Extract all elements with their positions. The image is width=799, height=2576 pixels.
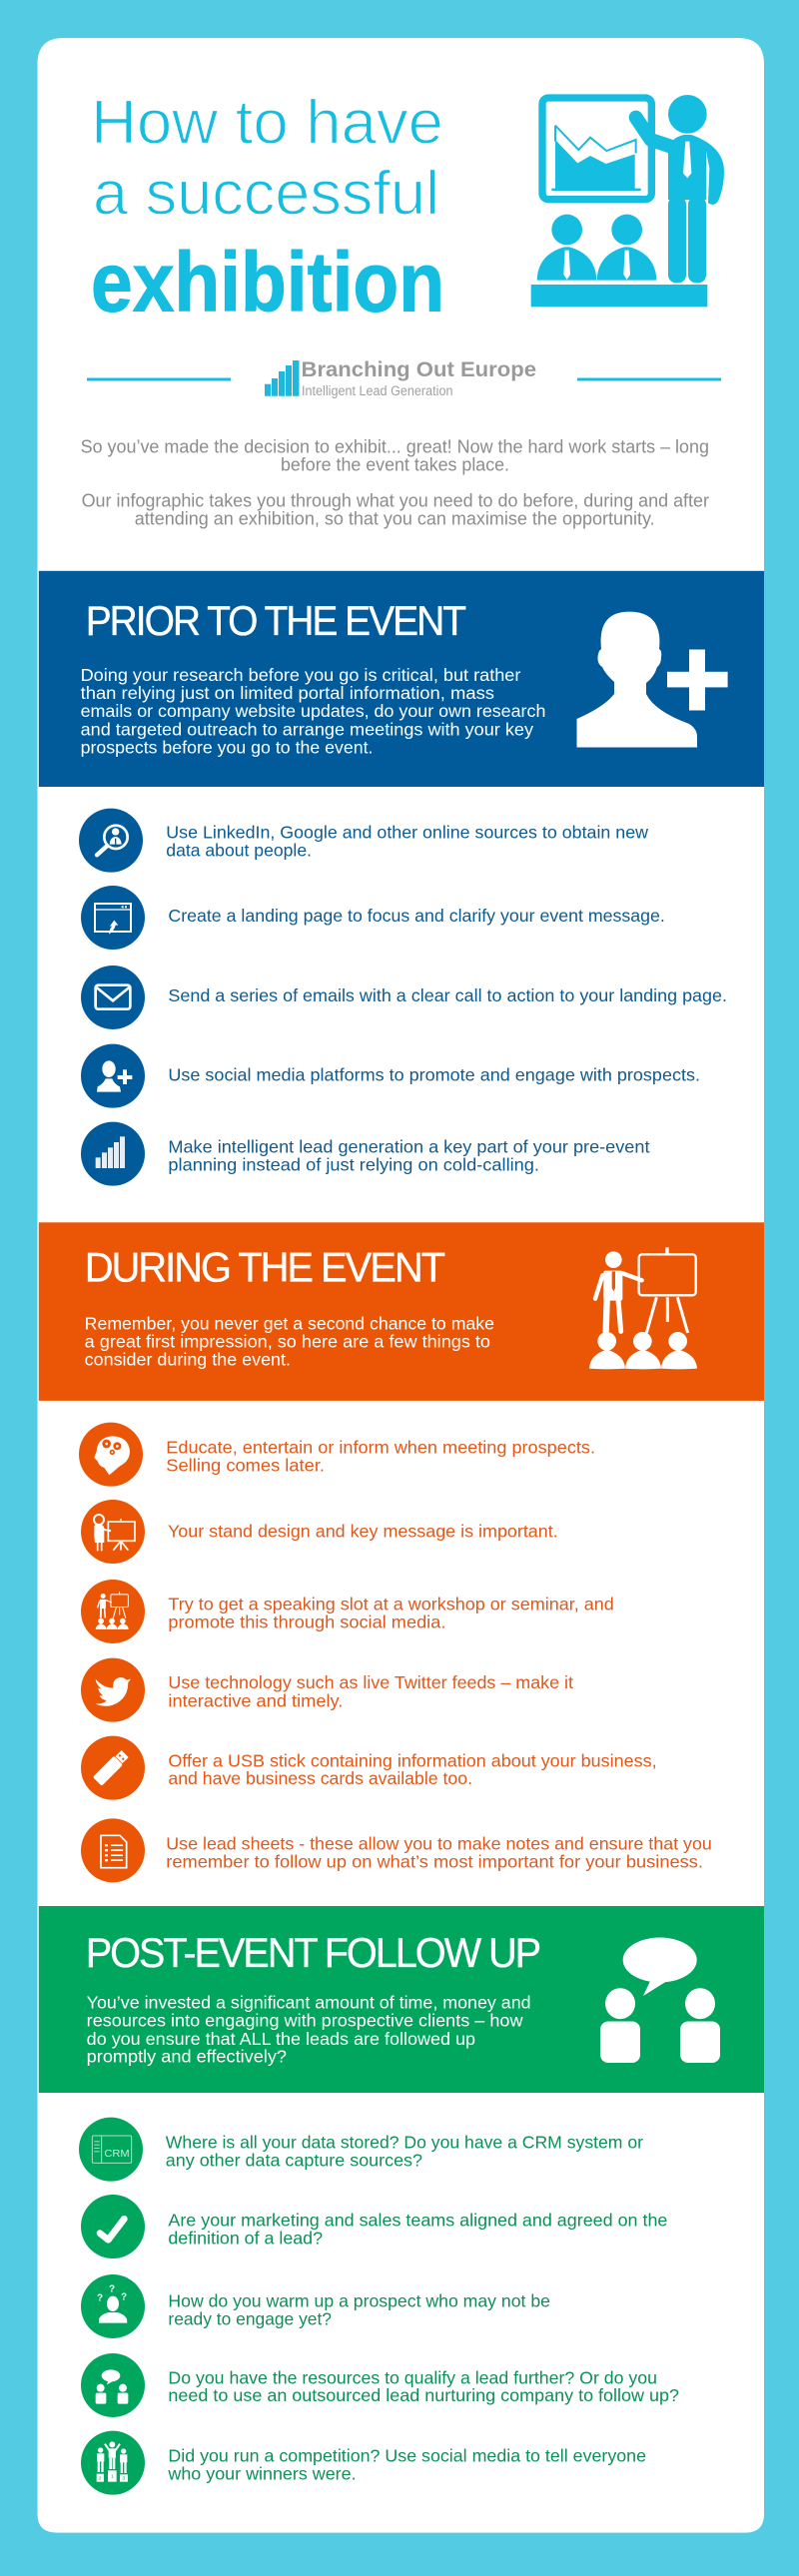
panel: prior list icons (79, 809, 145, 1186)
title: How to have (91, 88, 443, 158)
icon: CRM window (79, 2118, 143, 2182)
icon: person with question marks (81, 2274, 145, 2338)
text: during intro: Remember, you never get a second chance to make (85, 1313, 494, 1333)
icon: winners podium: 1 (111, 2474, 114, 2480)
icon: winners podium: 3 (122, 2476, 125, 2482)
panel: during list text: Educate, entertain or inform when meeting prospects. (166, 1438, 595, 1458)
heading: post-event follow up: POST-EVENT FOLLOW UP (86, 1929, 539, 1976)
panel: post-event list text: need to use an outsourced lead nurturing company to follow up? (168, 2385, 679, 2405)
logo: Intelligent Lead Generation (302, 383, 453, 398)
panel: post-event list text: Did you run a competition? Use social media to tell everyone (168, 2446, 646, 2466)
panel: during list text: Use technology such as live Twitter feeds – make it (168, 1672, 573, 1692)
icon: winners podium (81, 2431, 145, 2495)
panel: during list text: Selling comes later. (166, 1455, 325, 1475)
panel: post-event follow up header (39, 1906, 764, 2093)
icon: woman presenting (81, 1500, 145, 1564)
panel: post-event list text (166, 2133, 679, 2483)
intro text: Our infographic takes you through what you need to do before, during and after (82, 491, 709, 511)
text: post-event intro: resources into engaging with prospective clients – how (87, 2011, 523, 2031)
text: prior intro: Doing your research before you go is critical, but rather (81, 665, 521, 685)
panel: during list text: Use lead sheets - these allow you to make notes and ensure that you (166, 1833, 712, 1853)
text: prior intro (81, 665, 545, 757)
panel: during the event header (39, 1222, 764, 1401)
panel: prior to the event header (39, 571, 764, 787)
text: prior intro: prospects before you go to the event. (81, 737, 373, 757)
intro text: before the event takes place. (281, 454, 509, 474)
text: prior intro: and targeted outreach to arrange meetings with your key (81, 719, 533, 739)
panel: during list text: remember to follow up on what’s most important for your business. (166, 1851, 703, 1871)
panel: post-event list text: any other data capture sources? (166, 2151, 422, 2171)
text: post-event intro: do you ensure that ALL the leads are followed up (87, 2029, 475, 2049)
title: exhibition (91, 236, 444, 329)
icon: usb stick (81, 1736, 145, 1800)
icon: speaker and audience (81, 1580, 145, 1643)
icon: CRM window: CRM (104, 2149, 130, 2160)
panel: during list text: promote this through social media. (168, 1611, 445, 1631)
text: during intro: a great first impression, so here are a few things to (85, 1331, 490, 1351)
icon: presenter at easel (589, 1247, 697, 1369)
icon: head with gears (79, 1423, 143, 1487)
icon: signal bars (81, 1122, 145, 1186)
panel: post-event list text: ready to engage yet? (168, 2308, 332, 2328)
icon: person with question marks: ? (121, 2292, 127, 2303)
text: prior intro: than relying just on limited portal information, mass (81, 683, 494, 703)
panel: post-event list text: Do you have the resources to qualify a lead further? Or do you (168, 2367, 657, 2387)
panel: post-event list text: Where is all your data stored? Do you have a CRM system or (166, 2133, 643, 2153)
icon: check mark (81, 2195, 145, 2258)
title (91, 88, 444, 329)
text: post-event intro: promptly and effectively? (87, 2047, 287, 2067)
icon: add person (577, 612, 728, 747)
icon: lead sheet (81, 1818, 145, 1882)
panel: prior list text: Make intelligent lead generation a key part of your pre-event (168, 1136, 650, 1156)
heading: during the event: DURING THE EVENT (85, 1244, 444, 1291)
panel: prior list text: Use LinkedIn, Google and other online sources to obtain new (166, 823, 648, 843)
logo (265, 358, 536, 398)
panel: during list text: Your stand design and key message is important. (168, 1522, 558, 1542)
heading: prior to the event: PRIOR TO THE EVENT (86, 597, 465, 644)
intro text: So you’ve made the decision to exhibit... great! Now the hard work starts – long (81, 437, 709, 457)
title: a successful (93, 160, 439, 228)
icon: two people talking (600, 1937, 720, 2063)
panel: during list icons (79, 1423, 145, 1882)
panel: prior list text: Send a series of emails with a clear call to action to your landing page. (168, 985, 727, 1005)
panel: post-event list text: Are your marketing and sales teams aligned and agreed on the (168, 2211, 667, 2231)
icon: winners podium: 2 (99, 2476, 102, 2482)
text: during intro: consider during the event. (85, 1350, 291, 1370)
text: post-event intro: You’ve invested a significant amount of time, money and (87, 1992, 531, 2012)
icon: twitter bird (81, 1658, 145, 1722)
text: prior intro: emails or company website updates, do your own research (81, 701, 545, 721)
icon: two people talking small (81, 2353, 145, 2417)
icon: search person (79, 809, 143, 873)
panel: post-event list text: who your winners were. (167, 2463, 357, 2483)
panel: prior list text (166, 823, 727, 1174)
panel: post-event list text: definition of a lead? (168, 2228, 323, 2248)
panel: prior list text: Create a landing page to focus and clarify your event message. (168, 906, 665, 926)
icon: presenter with chart and audience (531, 95, 724, 307)
icon: person with question marks: ? (97, 2292, 103, 2303)
intro text: attending an exhibition, so that you can maximise the opportunity. (135, 508, 655, 528)
panel: prior list text: data about people. (166, 841, 312, 861)
panel: during list text: Offer a USB stick containing information about your business, (168, 1750, 657, 1770)
icon: envelope (81, 966, 145, 1029)
icon: person with question marks: ? (109, 2283, 115, 2294)
text: post-event intro (87, 1992, 531, 2067)
divider left (87, 377, 231, 381)
panel: during list text: interactive and timely. (168, 1691, 343, 1711)
divider right (577, 377, 721, 381)
text: during intro (85, 1313, 494, 1370)
panel: prior list text: Use social media platforms to promote and engage with prospects. (168, 1064, 700, 1084)
panel: during list text: and have business cards available too. (168, 1768, 472, 1788)
panel: post-event list text: How do you warm up a prospect who may not be (168, 2291, 550, 2311)
intro text (81, 437, 709, 528)
panel: post-event list icons (79, 2118, 145, 2495)
panel: prior list text: planning instead of just relying on cold-calling. (168, 1154, 539, 1174)
logo: Branching Out Europe (302, 358, 536, 381)
icon: landing page (81, 886, 145, 950)
icon: add contact (81, 1044, 145, 1108)
panel: during list text (166, 1438, 712, 1871)
panel: during list text: Try to get a speaking slot at a workshop or seminar, and (168, 1595, 614, 1614)
